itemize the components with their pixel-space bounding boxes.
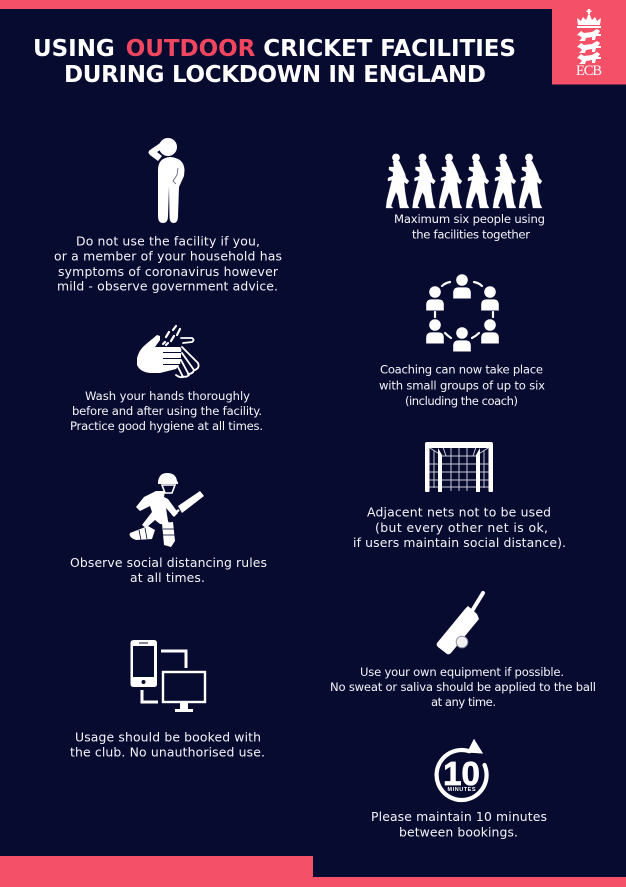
- text: booking: Usage should be booked with: [75, 730, 261, 744]
- text: social distancing: at all times.: [130, 570, 205, 585]
- text: adjacent nets: Adjacent nets not to be used: [367, 504, 551, 520]
- text: ten minutes: [371, 809, 547, 840]
- text: coaching groups: (including the coach): [405, 394, 518, 408]
- icon: circle of six people: [426, 274, 499, 352]
- icon: 10 minutes clock: [437, 740, 487, 800]
- text: coaching groups: Coaching can now take place: [380, 362, 543, 376]
- panel: adjacent nets: [353, 442, 566, 550]
- panel: own equipment: [330, 593, 596, 709]
- top pink bar: [0, 0, 626, 9]
- text: social distancing: [70, 555, 267, 585]
- panel: ten minutes: [371, 740, 547, 840]
- text: six people: the facilities together: [412, 228, 530, 242]
- text: booking: the club. No unauthorised use.: [70, 744, 265, 760]
- panel: booking: [70, 640, 265, 760]
- text: six people: [394, 212, 545, 242]
- text: symptoms: [54, 234, 282, 294]
- text: coaching groups: with small groups of up to six: [379, 378, 545, 392]
- panel: symptoms: [54, 138, 282, 294]
- panel: six people: [386, 154, 545, 242]
- icon: bat and ball: [437, 593, 483, 654]
- title: DURING LOCKDOWN IN ENGLAND: [64, 62, 486, 88]
- text: symptoms: symptoms of coronavirus however: [58, 264, 279, 279]
- text: hand washing: [70, 389, 263, 433]
- icon: 10 minutes clock: MINUTES: [448, 787, 476, 793]
- icon: three lions: [577, 29, 601, 64]
- icon: crown: [577, 9, 601, 28]
- text: adjacent nets: (but every other net is ok,: [375, 520, 548, 535]
- text: adjacent nets: if users maintain social distance).: [353, 535, 566, 550]
- text: symptoms: mild - observe government advice.: [57, 278, 278, 294]
- panel: social distancing: [70, 473, 267, 585]
- icon: cricket net: [425, 442, 493, 492]
- text: own equipment: Use your own equipment if possible.: [360, 665, 564, 679]
- text: own equipment: No sweat or saliva should be applied to the ball: [330, 680, 596, 694]
- text: symptoms: Do not use the facility if you,: [76, 234, 260, 248]
- panel: coaching groups: [379, 274, 545, 408]
- text: ten minutes: between bookings.: [399, 824, 518, 840]
- text: hand washing: before and after using the facility.: [72, 404, 262, 418]
- icon: 10 minutes clock: 10: [443, 755, 480, 792]
- panel: hand washing: [70, 326, 263, 433]
- text: booking: [70, 730, 265, 760]
- text: ten minutes: Please maintain 10 minutes: [371, 809, 547, 824]
- ECB logo panel: [552, 9, 626, 84]
- text: hand washing: Wash your hands thoroughly: [85, 389, 250, 403]
- icon: six walking people: [386, 154, 542, 208]
- icon: person with hand on head: [148, 138, 184, 223]
- logo wordmark: ECB: [576, 63, 602, 79]
- text: six people: Maximum six people using: [394, 212, 545, 226]
- title: USING OUTDOOR CRICKET FACILITIES: [33, 36, 516, 62]
- text: adjacent nets: [353, 504, 566, 550]
- text: hand washing: Practice good hygiene at all times.: [70, 419, 263, 433]
- title: [33, 36, 516, 88]
- icon: phone and monitor: [130, 640, 205, 712]
- bottom pink band: [0, 856, 626, 887]
- text: own equipment: at any time.: [431, 695, 496, 709]
- text: symptoms: or a member of your household has: [54, 248, 282, 264]
- text: social distancing: Observe social distancing rules: [70, 555, 267, 570]
- text: own equipment: [330, 665, 596, 709]
- icon: batsman: [130, 473, 204, 547]
- icon: washing hands: [137, 326, 199, 377]
- text: coaching groups: [379, 362, 545, 408]
